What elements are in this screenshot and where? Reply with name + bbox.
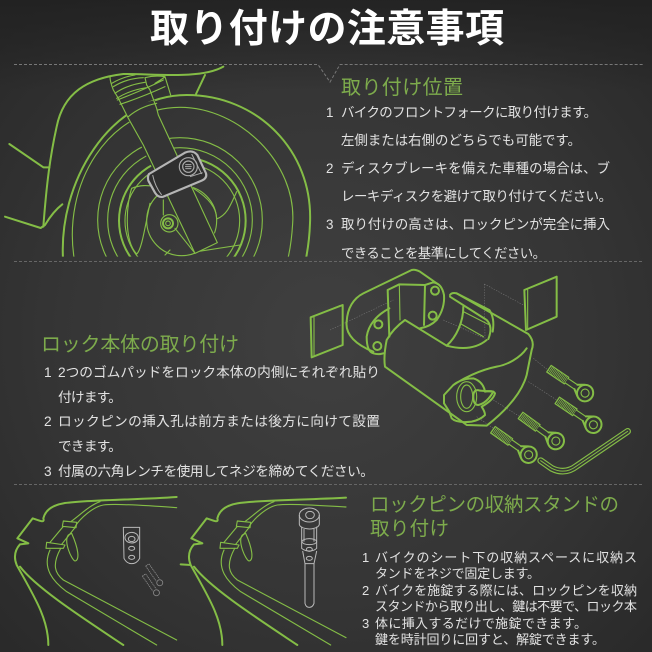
text block: lock body installation	[44, 364, 380, 479]
front fork	[110, 75, 218, 253]
text block: lock body installation: 付けます。	[58, 390, 122, 405]
text block: lock body installation: 3	[44, 464, 52, 479]
rubber pad right	[524, 277, 557, 330]
title: 取り付けの注意事項	[150, 8, 504, 51]
text block: mounting position	[326, 105, 612, 261]
text block: mounting position: 1	[326, 105, 333, 120]
text block: lock body installation: ロックピンの挿入孔は前方または後方に向けて設置	[58, 413, 380, 429]
bolt 2	[553, 393, 605, 436]
text block: lock pin storage stand: タンドをネジで固定します。	[375, 566, 540, 581]
lock pin in stand	[299, 508, 319, 607]
stand bracket	[123, 527, 140, 564]
text block: mounting position: 取り付けの高さは、ロックピンが完全に挿入	[341, 216, 610, 232]
bolt 3	[516, 409, 567, 453]
text block: lock body installation: 付属の六角レンチを使用してネジを締めてください。	[58, 463, 374, 479]
text block: mounting position: バイクのフロントフォークに取り付けます。	[341, 105, 597, 120]
text block: mounting position: 3	[326, 217, 333, 232]
fender and frame	[5, 67, 223, 228]
text block: lock pin storage stand: 体に挿入するだけで施錠できます。	[375, 616, 587, 631]
heading: mounting position: 取り付け位置	[341, 76, 463, 99]
heading: lock pin storage stand	[370, 494, 619, 540]
lock housing	[347, 270, 533, 426]
text block: lock pin storage stand: バイクを施錠する際には、ロックピンを収納	[375, 583, 637, 598]
text block: lock pin storage stand: 鍵を時計回りに回すと、解錠できます。	[375, 632, 605, 647]
hex wrench	[541, 431, 628, 471]
heading: lock body installation: ロック本体の取り付け	[41, 333, 239, 356]
text block: mounting position: できることを基準にしてください。	[341, 245, 546, 261]
text block: lock body installation: 2つのゴムパッドをロック本体の内側にそれぞれ貼り	[58, 364, 380, 380]
illustration: exploded lock body	[311, 270, 628, 471]
text block: mounting position: レーキディスクを避けて取り付けてください。	[341, 188, 612, 204]
text block: mounting position: ディスクブレーキを備えた車種の場合は、ブ	[341, 160, 610, 176]
text block: lock pin storage stand: バイクのシート下の収納スペースに収納ス	[375, 550, 637, 565]
text block: lock body installation: 2	[44, 414, 52, 429]
axle	[161, 215, 178, 232]
text block: lock pin storage stand	[362, 550, 637, 647]
heading: lock pin storage stand: ロックピンの収納スタンドの	[370, 494, 619, 516]
illustration: seat storage with pin in stand	[181, 498, 346, 645]
text block: lock pin storage stand: 2	[362, 583, 369, 598]
text block: mounting position: 左側または右側のどちらでも可能です。	[341, 133, 581, 148]
text block: lock body installation: できます。	[58, 439, 122, 454]
text block: lock pin storage stand: スタンドから取り出し、鍵は不要で、ロック本	[375, 599, 637, 614]
stand screws	[142, 563, 164, 597]
bolt 4	[488, 423, 540, 466]
rubber pad left	[311, 305, 343, 357]
text block: lock body installation: 1	[44, 365, 52, 380]
illustration: motorcycle front wheel with lock	[4, 66, 312, 257]
bolt 1	[544, 362, 596, 405]
heading: lock pin storage stand: 取り付け	[370, 518, 449, 540]
text block: mounting position: 2	[326, 161, 333, 176]
illustration: seat storage with stand parts	[15, 497, 177, 645]
text block: lock pin storage stand: 1	[362, 550, 369, 565]
lock on fork	[148, 151, 206, 197]
text block: lock pin storage stand: 3	[362, 616, 369, 631]
